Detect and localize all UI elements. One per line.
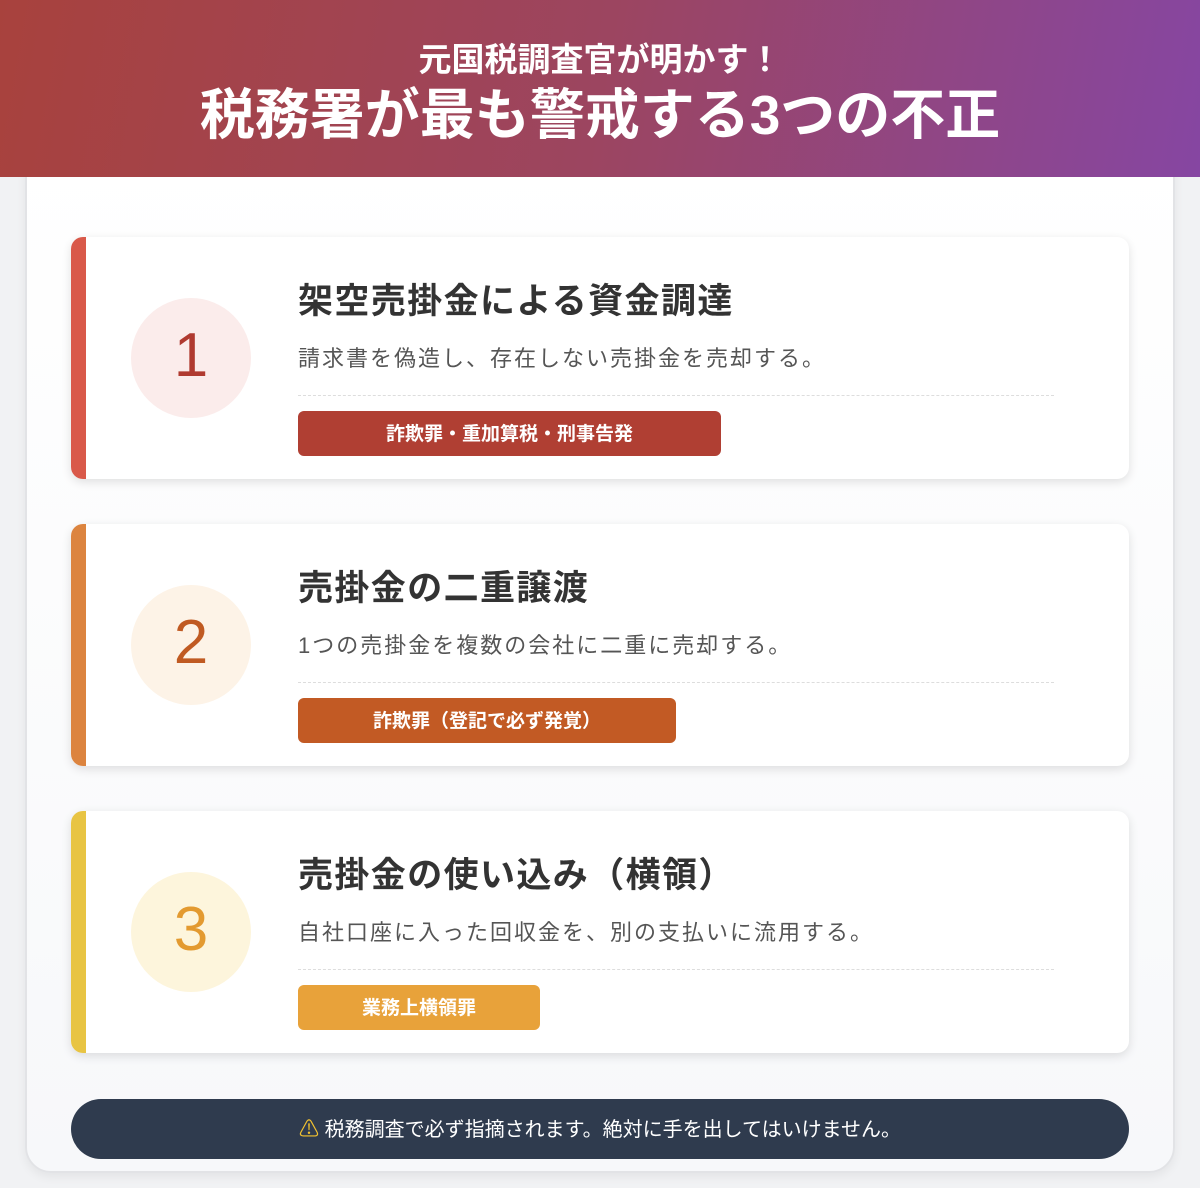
card 1 tag — [298, 411, 721, 456]
title: 税務署が最も警戒する3つの不正 — [200, 84, 1000, 146]
card 1 — [71, 237, 1129, 479]
number circle 3: 3 — [174, 895, 208, 964]
card 3 description: 自社口座に入った回収金を、別の支払いに流用する。 — [298, 920, 874, 945]
card 3 — [71, 811, 1129, 1053]
card 3 tag — [298, 985, 540, 1030]
card 2 description: 1つの売掛金を複数の会社に二重に売却する。 — [298, 633, 792, 658]
number circle 1: 1 — [174, 321, 208, 390]
card 2 tag — [298, 698, 676, 743]
card 3 title: 売掛金の使い込み（横領） — [298, 856, 735, 895]
header — [0, 0, 1200, 177]
card 3 tag: 業務上横領罪 — [362, 998, 476, 1019]
subtitle: 元国税調査官が明かす！ — [418, 41, 782, 78]
number circle 2: 2 — [174, 608, 208, 677]
number circle 2 — [131, 585, 251, 705]
footer warning: ⚠ 税務調査で必ず指摘されます。絶対に手を出してはいけません。 — [299, 1119, 901, 1141]
number circle 3 — [131, 872, 251, 992]
number circle 1 — [131, 298, 251, 418]
card 2 title: 売掛金の二重譲渡 — [298, 569, 589, 608]
footer warning — [71, 1099, 1129, 1159]
card 2 tag: 詐欺罪（登記で必ず発覚） — [373, 711, 601, 732]
card 1 description: 請求書を偽造し、存在しない売掛金を売却する。 — [298, 346, 826, 371]
card 1 tag: 詐欺罪・重加算税・刑事告発 — [386, 424, 633, 445]
card 2 — [71, 524, 1129, 766]
card 1 title: 架空売掛金による資金調達 — [298, 282, 734, 321]
